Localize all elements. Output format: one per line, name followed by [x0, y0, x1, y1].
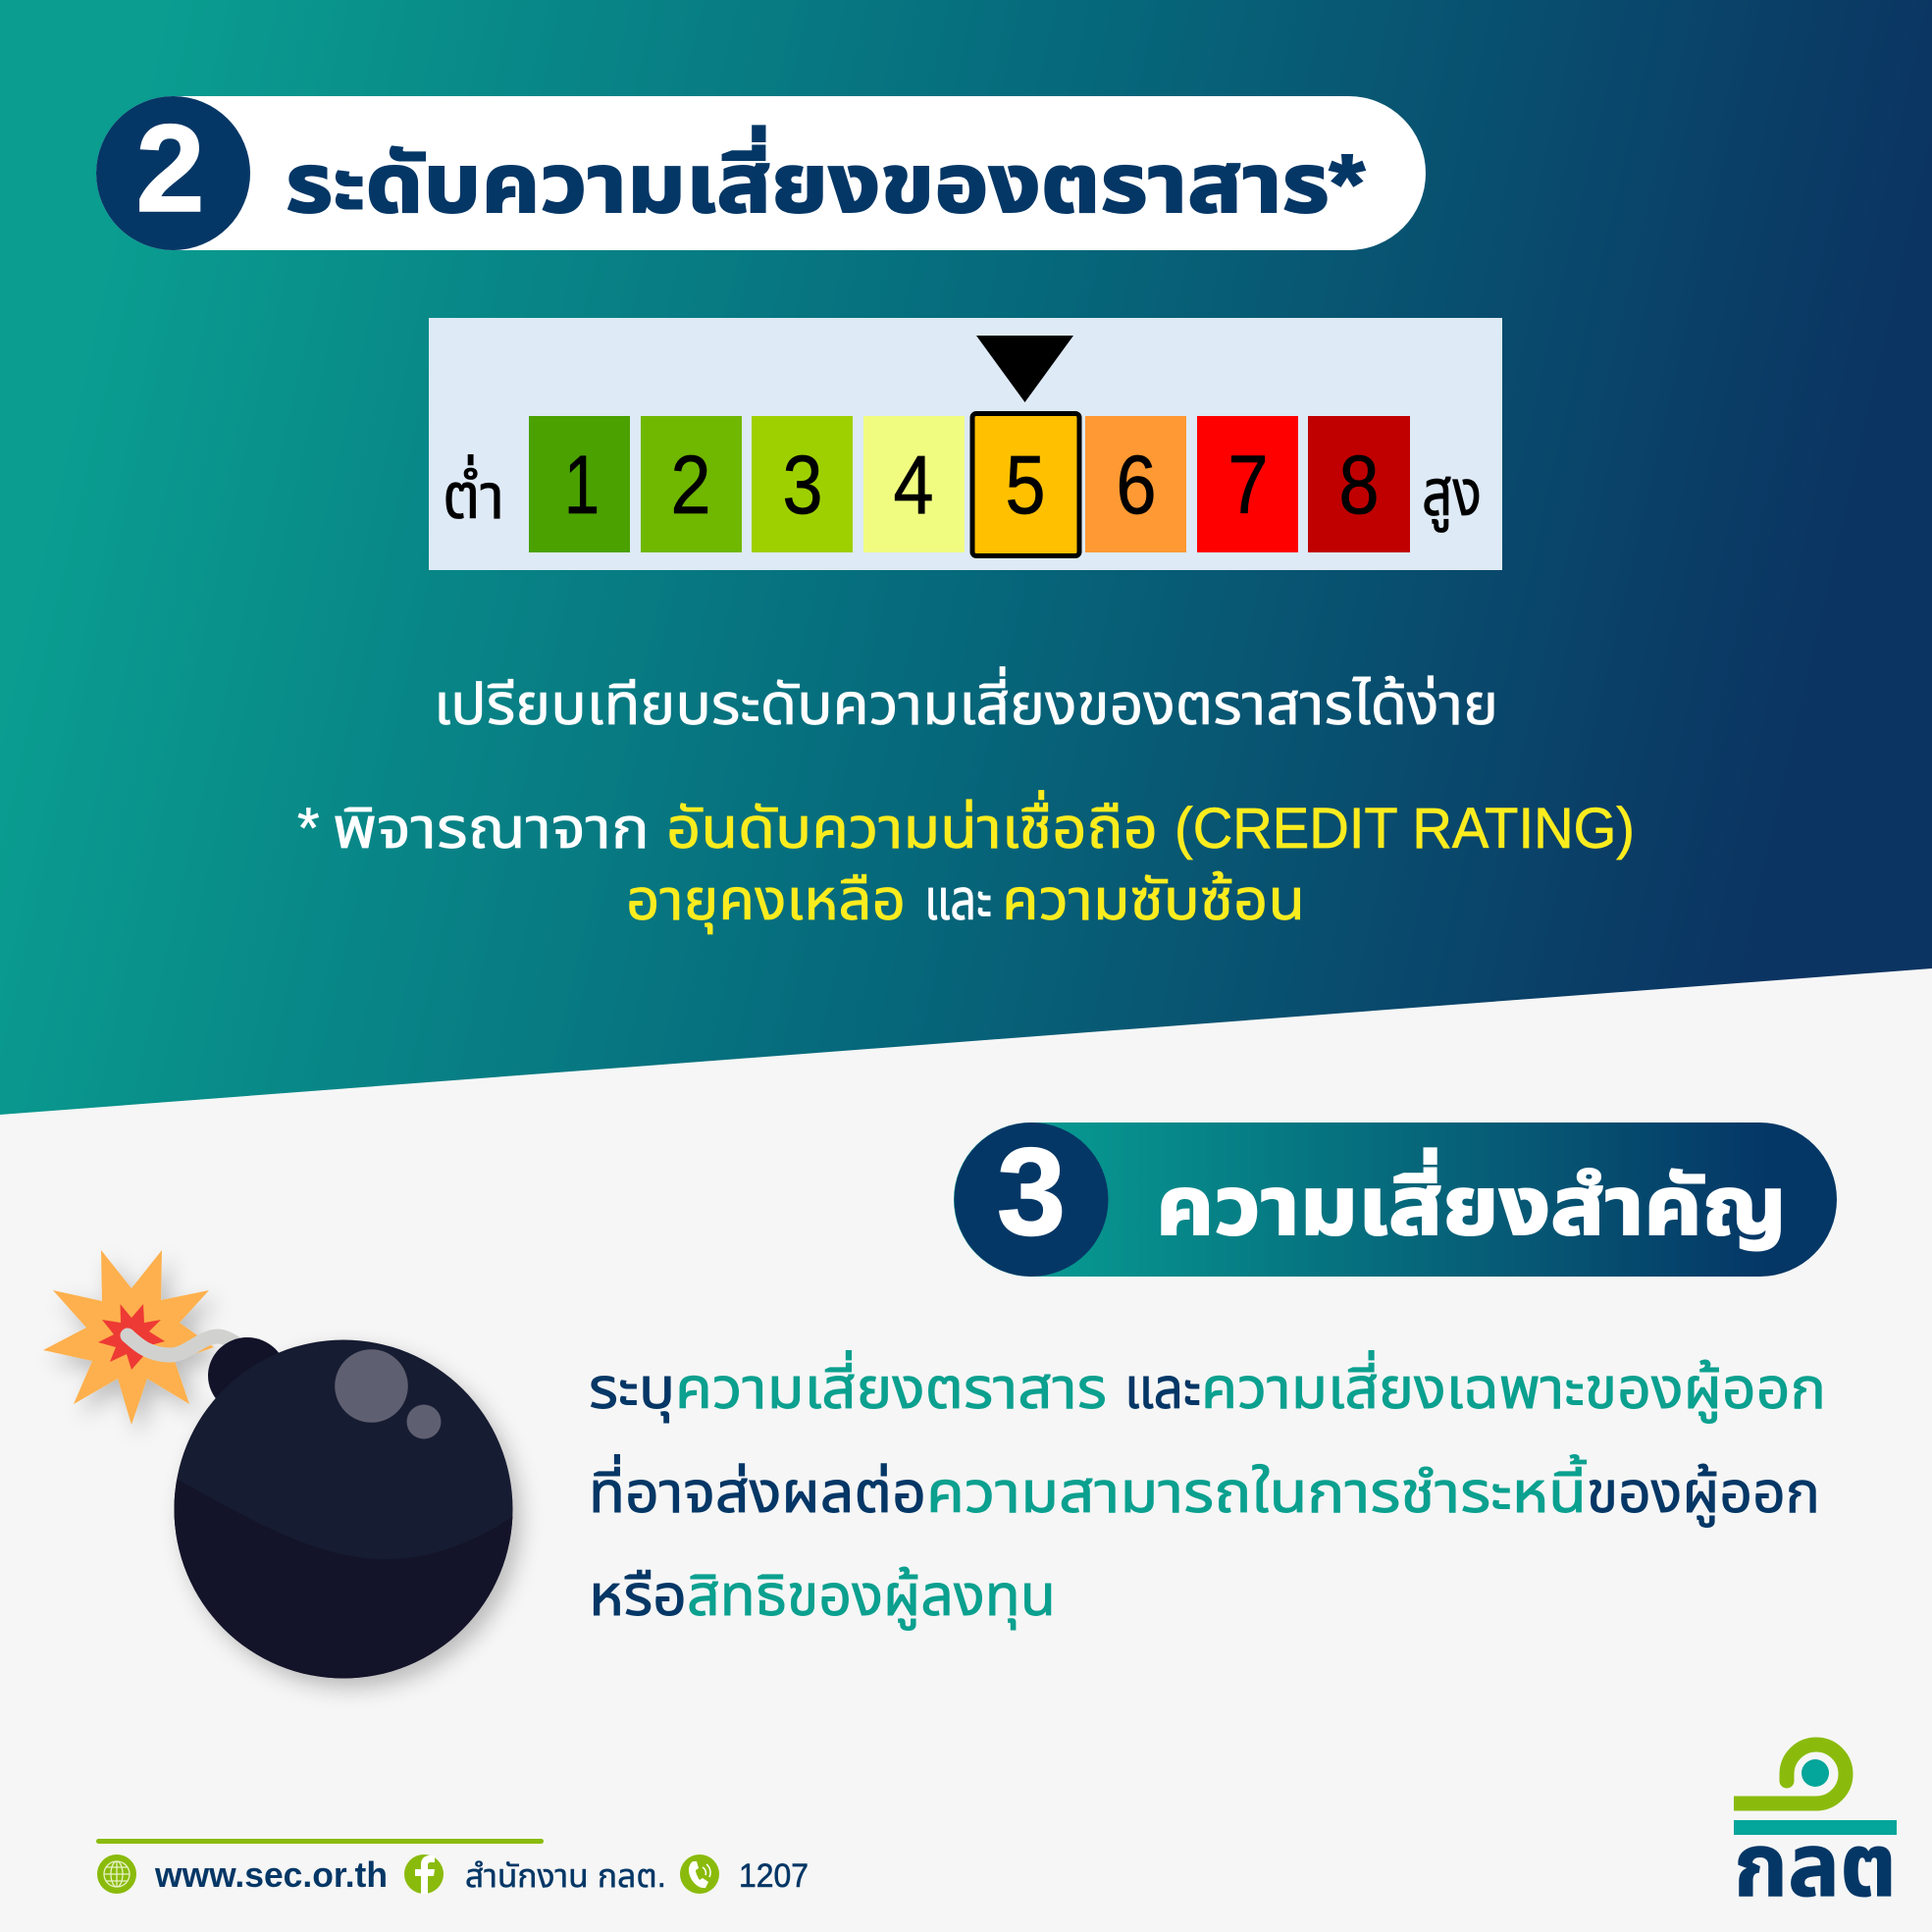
- risk level 1: [529, 416, 630, 552]
- text block: key risks description: ระบุ: [589, 1357, 675, 1423]
- text block: key risks description: ที่อาจส่งผลต่อ: [589, 1454, 926, 1525]
- risk level 4: 4: [893, 439, 934, 531]
- hotline number: 1207: [739, 1857, 809, 1895]
- label: high: สูง: [1422, 456, 1482, 533]
- icon: number 3 badge: 3: [997, 1123, 1066, 1261]
- heading: section 3 pill: [954, 1123, 1837, 1277]
- text block: criteria footnote: [297, 790, 1635, 934]
- text block: criteria footnote: พิจารณาจาก: [333, 797, 650, 861]
- risk level 5 highlighted: 5: [1005, 439, 1046, 531]
- bomb lower shading: [175, 1480, 512, 1678]
- risk level 7: 7: [1228, 439, 1268, 531]
- footer: contact bar: [96, 1839, 809, 1895]
- arrow: level marker: [976, 336, 1073, 402]
- risk level 6: [1085, 416, 1186, 552]
- risk level 2: [641, 416, 742, 552]
- logo wordmark: กลต: [1734, 1817, 1897, 1915]
- icon: facebook: [404, 1854, 444, 1894]
- icon: number 2 badge: 2: [135, 99, 205, 237]
- text block: key risks description: [589, 1350, 1826, 1630]
- icon: globe: [97, 1854, 136, 1894]
- text block: criteria footnote: (CREDIT RATING): [1175, 797, 1635, 861]
- risk level 1: 1: [564, 439, 600, 531]
- text block: comparison note: เปรียบเทียบระดับความเสี่ยงของตราสารได้ง่าย: [434, 666, 1498, 737]
- icon: number 2 badge: [96, 96, 250, 250]
- bomb highlight small: [406, 1405, 442, 1438]
- text block: key risks description: หรือ: [589, 1564, 687, 1628]
- text block: key risks description: สิทธิของผู้ลงทุน: [687, 1564, 1056, 1630]
- risk level 2: 2: [671, 439, 710, 531]
- risk level 3: [752, 416, 853, 552]
- text block: key risks description: ความเสี่ยงตราสาร: [675, 1350, 1107, 1421]
- icon: bomb: [43, 1250, 520, 1688]
- office name: สำนักงาน กลต.: [465, 1857, 666, 1894]
- spark: [43, 1250, 214, 1425]
- text block: criteria footnote: ความซับซ้อน: [1002, 868, 1305, 932]
- label: low: ต่ำ: [443, 454, 504, 532]
- risk level 6: 6: [1117, 439, 1156, 531]
- risk level 5 highlighted: [972, 414, 1079, 555]
- risk level 7: [1197, 416, 1298, 552]
- text block: criteria footnote: อายุคงเหลือ: [626, 868, 906, 934]
- risk level 8: 8: [1338, 439, 1380, 531]
- text block: key risks description: และ: [1124, 1357, 1201, 1421]
- bomb body: [175, 1340, 512, 1678]
- fuse: [128, 1335, 235, 1355]
- risk level 3: 3: [783, 439, 822, 531]
- website: www.sec.or.th: [154, 1854, 388, 1895]
- text block: criteria footnote: และ: [924, 868, 992, 932]
- heading: section 2 pill: [96, 96, 1426, 250]
- risk level 4: [863, 416, 965, 552]
- text block: key risks description: ของผู้ออก: [1587, 1461, 1820, 1527]
- text block: key risks description: ความเสี่ยงเฉพาะของผู้ออก: [1201, 1350, 1826, 1423]
- icon: phone: [680, 1854, 719, 1894]
- text block: criteria footnote: *: [297, 797, 320, 861]
- heading text: section 3: ความเสี่ยงสำคัญ: [1156, 1148, 1787, 1252]
- text block: key risks description: ความสามารถในการชำระหนี้: [926, 1454, 1587, 1525]
- risk scale panel: [429, 318, 1502, 570]
- heading text: section 2: ระดับความเสี่ยงของตราสาร*: [286, 126, 1365, 230]
- logo: SEC: [1734, 1745, 1897, 1915]
- text block: criteria footnote: อันดับความน่าเชื่อถือ: [666, 790, 1158, 861]
- bomb highlight large: [335, 1349, 408, 1423]
- risk level 8: [1308, 416, 1410, 552]
- bomb cap: [208, 1337, 287, 1414]
- icon: number 3 badge: [954, 1123, 1109, 1277]
